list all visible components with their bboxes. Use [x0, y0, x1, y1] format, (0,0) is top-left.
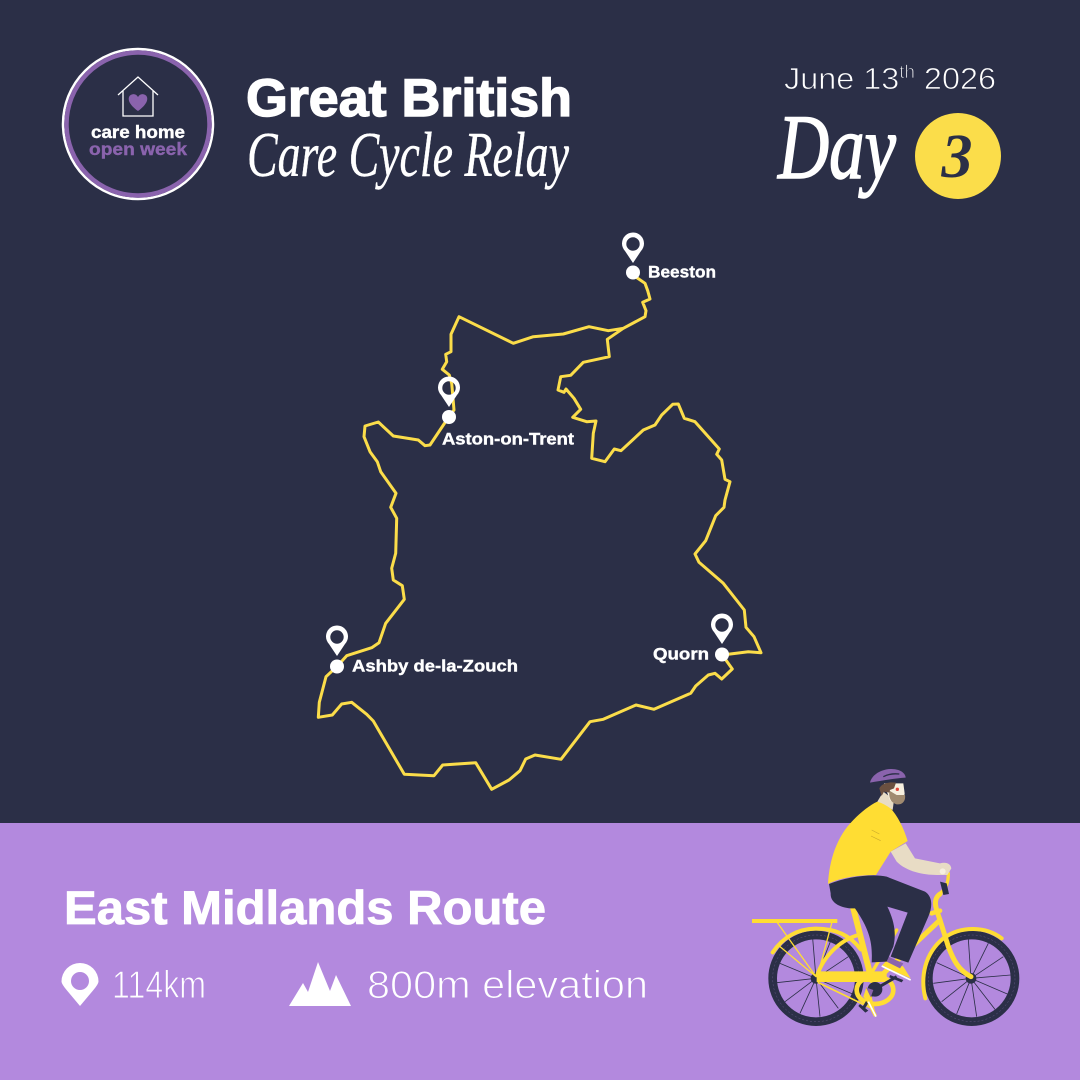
icon: mountain	[289, 962, 351, 1006]
date: th	[899, 62, 915, 82]
marker: Aston-on-Trent	[438, 376, 574, 448]
marker: Quorn	[653, 613, 733, 664]
route map	[318, 272, 761, 789]
marker: Aston-on-Trent: Aston-on-Trent	[442, 430, 574, 448]
arm	[891, 843, 951, 875]
title: Care Cycle Relay	[247, 119, 569, 190]
logo: care home open week	[63, 49, 213, 199]
logo: care home open week: open week	[89, 139, 187, 159]
route heading: East Midlands Route	[64, 881, 546, 934]
crank and pedals	[858, 882, 949, 1013]
shirt	[828, 802, 908, 884]
shoes	[863, 957, 911, 1017]
date: 2026	[915, 61, 996, 96]
head	[870, 769, 906, 810]
marker: Beeston	[622, 232, 716, 282]
icon: distance pin	[62, 963, 98, 1006]
title: Great British	[246, 69, 572, 128]
day label: Day	[776, 96, 896, 198]
day number badge	[915, 113, 1001, 199]
title	[246, 69, 572, 190]
date: June 13	[784, 61, 894, 96]
rear wheel	[773, 935, 859, 1022]
distance text: 114km	[112, 964, 206, 1007]
day number badge: 3	[940, 123, 972, 191]
illustration: cyclist on bike	[752, 769, 1015, 1022]
trousers	[829, 875, 931, 963]
marker: Quorn: Quorn	[653, 644, 709, 664]
bottom panel	[0, 823, 1080, 1080]
marker: Beeston: Beeston	[648, 262, 716, 282]
marker: Ashby de-la-Zouch	[326, 625, 518, 676]
logo: care home open week: care home	[91, 122, 185, 142]
elevation text: 800m elevation	[367, 964, 648, 1007]
marker: Ashby de-la-Zouch: Ashby de-la-Zouch	[352, 656, 518, 676]
bike frame	[752, 873, 1002, 1015]
front wheel	[928, 935, 1015, 1022]
